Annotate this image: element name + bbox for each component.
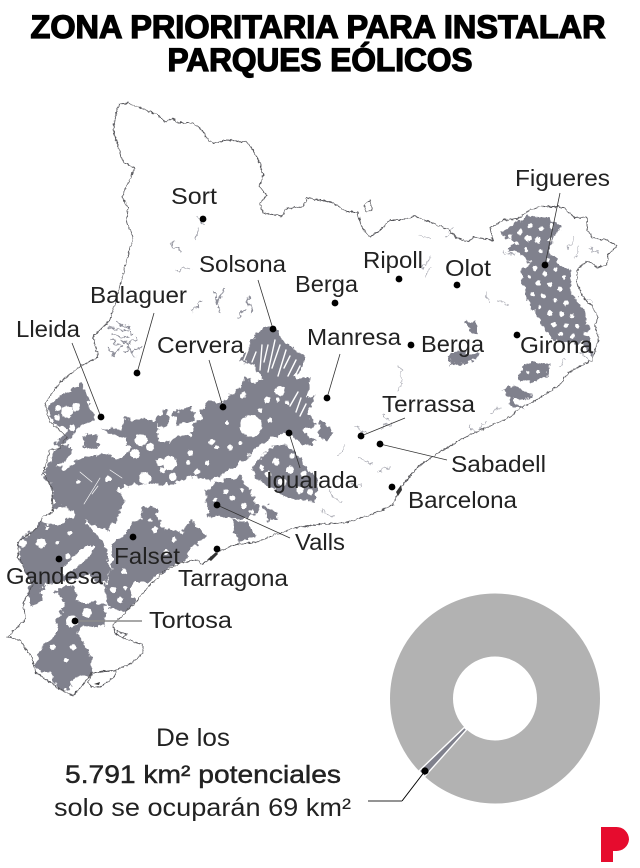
city labels: Berga [295, 271, 358, 297]
city labels: Solsona [199, 251, 286, 277]
caption text: De los [156, 724, 230, 752]
city labels: Berga [421, 331, 484, 357]
city labels: Ripoll [363, 247, 423, 273]
donut slice: 69 km² [419, 727, 467, 776]
city labels [6, 165, 610, 633]
map: outline of Catalonia [7, 103, 617, 696]
city labels: Lleida [16, 316, 80, 342]
city markers [56, 216, 548, 624]
city labels: Falset [114, 543, 181, 569]
city labels: Olot [445, 255, 492, 281]
caption text: solo se ocuparán 69 km² [54, 794, 351, 822]
donut leader and marker [368, 767, 429, 801]
coastal details: ports [94, 485, 402, 685]
caption text [54, 724, 351, 822]
leader lines [72, 193, 560, 621]
city labels: Tarragona [178, 565, 288, 591]
title [30, 9, 606, 78]
title: PARQUES EÓLICOS [168, 42, 472, 78]
logo [601, 827, 629, 862]
city labels: Sabadell [451, 451, 546, 477]
caption text: 5.791 km² potenciales [65, 761, 341, 789]
city labels: Tortosa [149, 607, 232, 633]
city labels: Gandesa [6, 563, 103, 589]
map: wind priority zones [18, 216, 598, 690]
city labels: Balaguer [90, 282, 187, 308]
city labels: Cervera [157, 332, 244, 358]
city labels: Girona [520, 332, 593, 358]
city labels: Igualada [266, 467, 358, 493]
white gaps and lakes in zones [19, 224, 588, 662]
city labels: Sort [171, 183, 218, 209]
donut chart [419, 625, 568, 776]
city labels: Manresa [307, 324, 401, 350]
city labels: Figueres [515, 165, 610, 191]
city labels: Terrassa [382, 391, 475, 417]
title: ZONA PRIORITARIA PARA INSTALAR [30, 9, 606, 45]
city labels: Barcelona [408, 487, 517, 513]
city labels: Valls [295, 529, 345, 555]
